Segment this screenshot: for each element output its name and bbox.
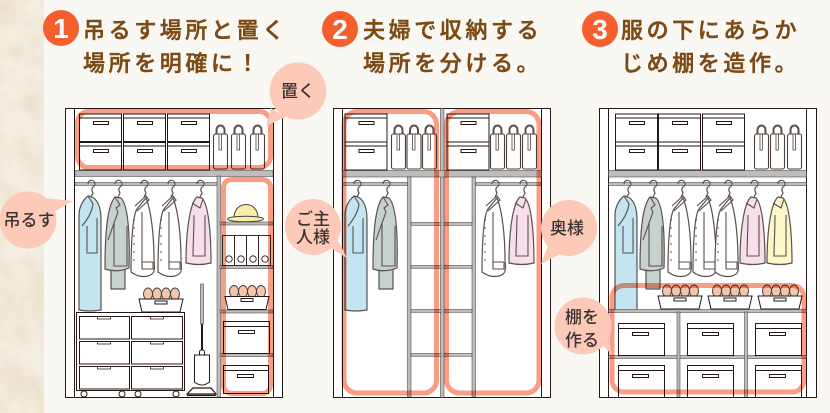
bags (754, 126, 802, 169)
drawer chest (76, 312, 184, 397)
callout: 棚を作る: 作る (565, 331, 599, 350)
storage boxes (80, 114, 210, 170)
bags (214, 126, 264, 169)
storage boxes (345, 114, 489, 170)
heading 3 text (621, 18, 800, 76)
number badge 1 (43, 10, 79, 46)
heading 2 text: 夫婦で収納する (363, 18, 542, 43)
storage boxes (616, 114, 744, 170)
callout: 置く (266, 62, 326, 126)
bags (392, 126, 536, 169)
callout: 棚を作る (554, 298, 612, 355)
lower boxes (618, 324, 802, 397)
highlight: top area (78, 112, 270, 168)
side boxes (224, 322, 270, 394)
heading 3 text: じめ棚を造作。 (621, 51, 800, 76)
heading 2 text: 場所を分ける。 (363, 51, 542, 76)
built-in shelves (608, 310, 806, 397)
callout: 吊るす (0, 192, 73, 248)
highlight: wife side (446, 112, 539, 393)
heading 3 text: 服の下にあらか (621, 18, 800, 43)
callout: 奥様: 奥様 (550, 219, 584, 238)
hanging clothes (615, 180, 792, 311)
panel: closet 1 (66, 108, 282, 398)
panel: closet 2 (334, 108, 550, 398)
highlight: side shelves (224, 180, 270, 394)
number badge 1: 1 (53, 13, 69, 44)
hanging clothes (345, 180, 534, 311)
binders (222, 236, 270, 266)
heading 3 (582, 11, 800, 76)
number badge 3 (582, 11, 618, 47)
hanging clothes (79, 180, 211, 311)
callout: 吊るす: 吊るす (4, 211, 54, 230)
callout: 棚を作る: 棚を (565, 308, 599, 327)
callout: 置く: 置く (281, 82, 315, 101)
number badge 2 (322, 11, 358, 47)
vacuum cleaner (187, 284, 216, 396)
basket side (225, 286, 269, 310)
panel: closet 3 (600, 108, 816, 398)
highlight: built-in shelves (612, 286, 804, 392)
side shelves (220, 204, 273, 394)
number badge 3: 3 (592, 14, 608, 45)
highlight: husband side (344, 112, 436, 393)
hat (228, 204, 264, 222)
heading 1 text: 場所を明確に！ (83, 51, 262, 76)
heading 2 (322, 11, 542, 76)
heading 1 (43, 10, 288, 76)
textured left strip (0, 0, 44, 413)
callout: ご主人様 (285, 199, 347, 258)
callout: ご主人様: ご主 (296, 210, 330, 229)
basket (139, 288, 183, 312)
heading 1 text (83, 18, 288, 76)
heading 1 text: 吊るす場所と置く (83, 18, 288, 43)
callout: 奥様 (541, 200, 597, 264)
heading 2 text (363, 18, 542, 76)
number badge 2: 2 (332, 14, 348, 45)
callout: ご主人様: 人様 (296, 228, 330, 247)
tall centre shelves (408, 177, 476, 397)
baskets (658, 285, 802, 309)
